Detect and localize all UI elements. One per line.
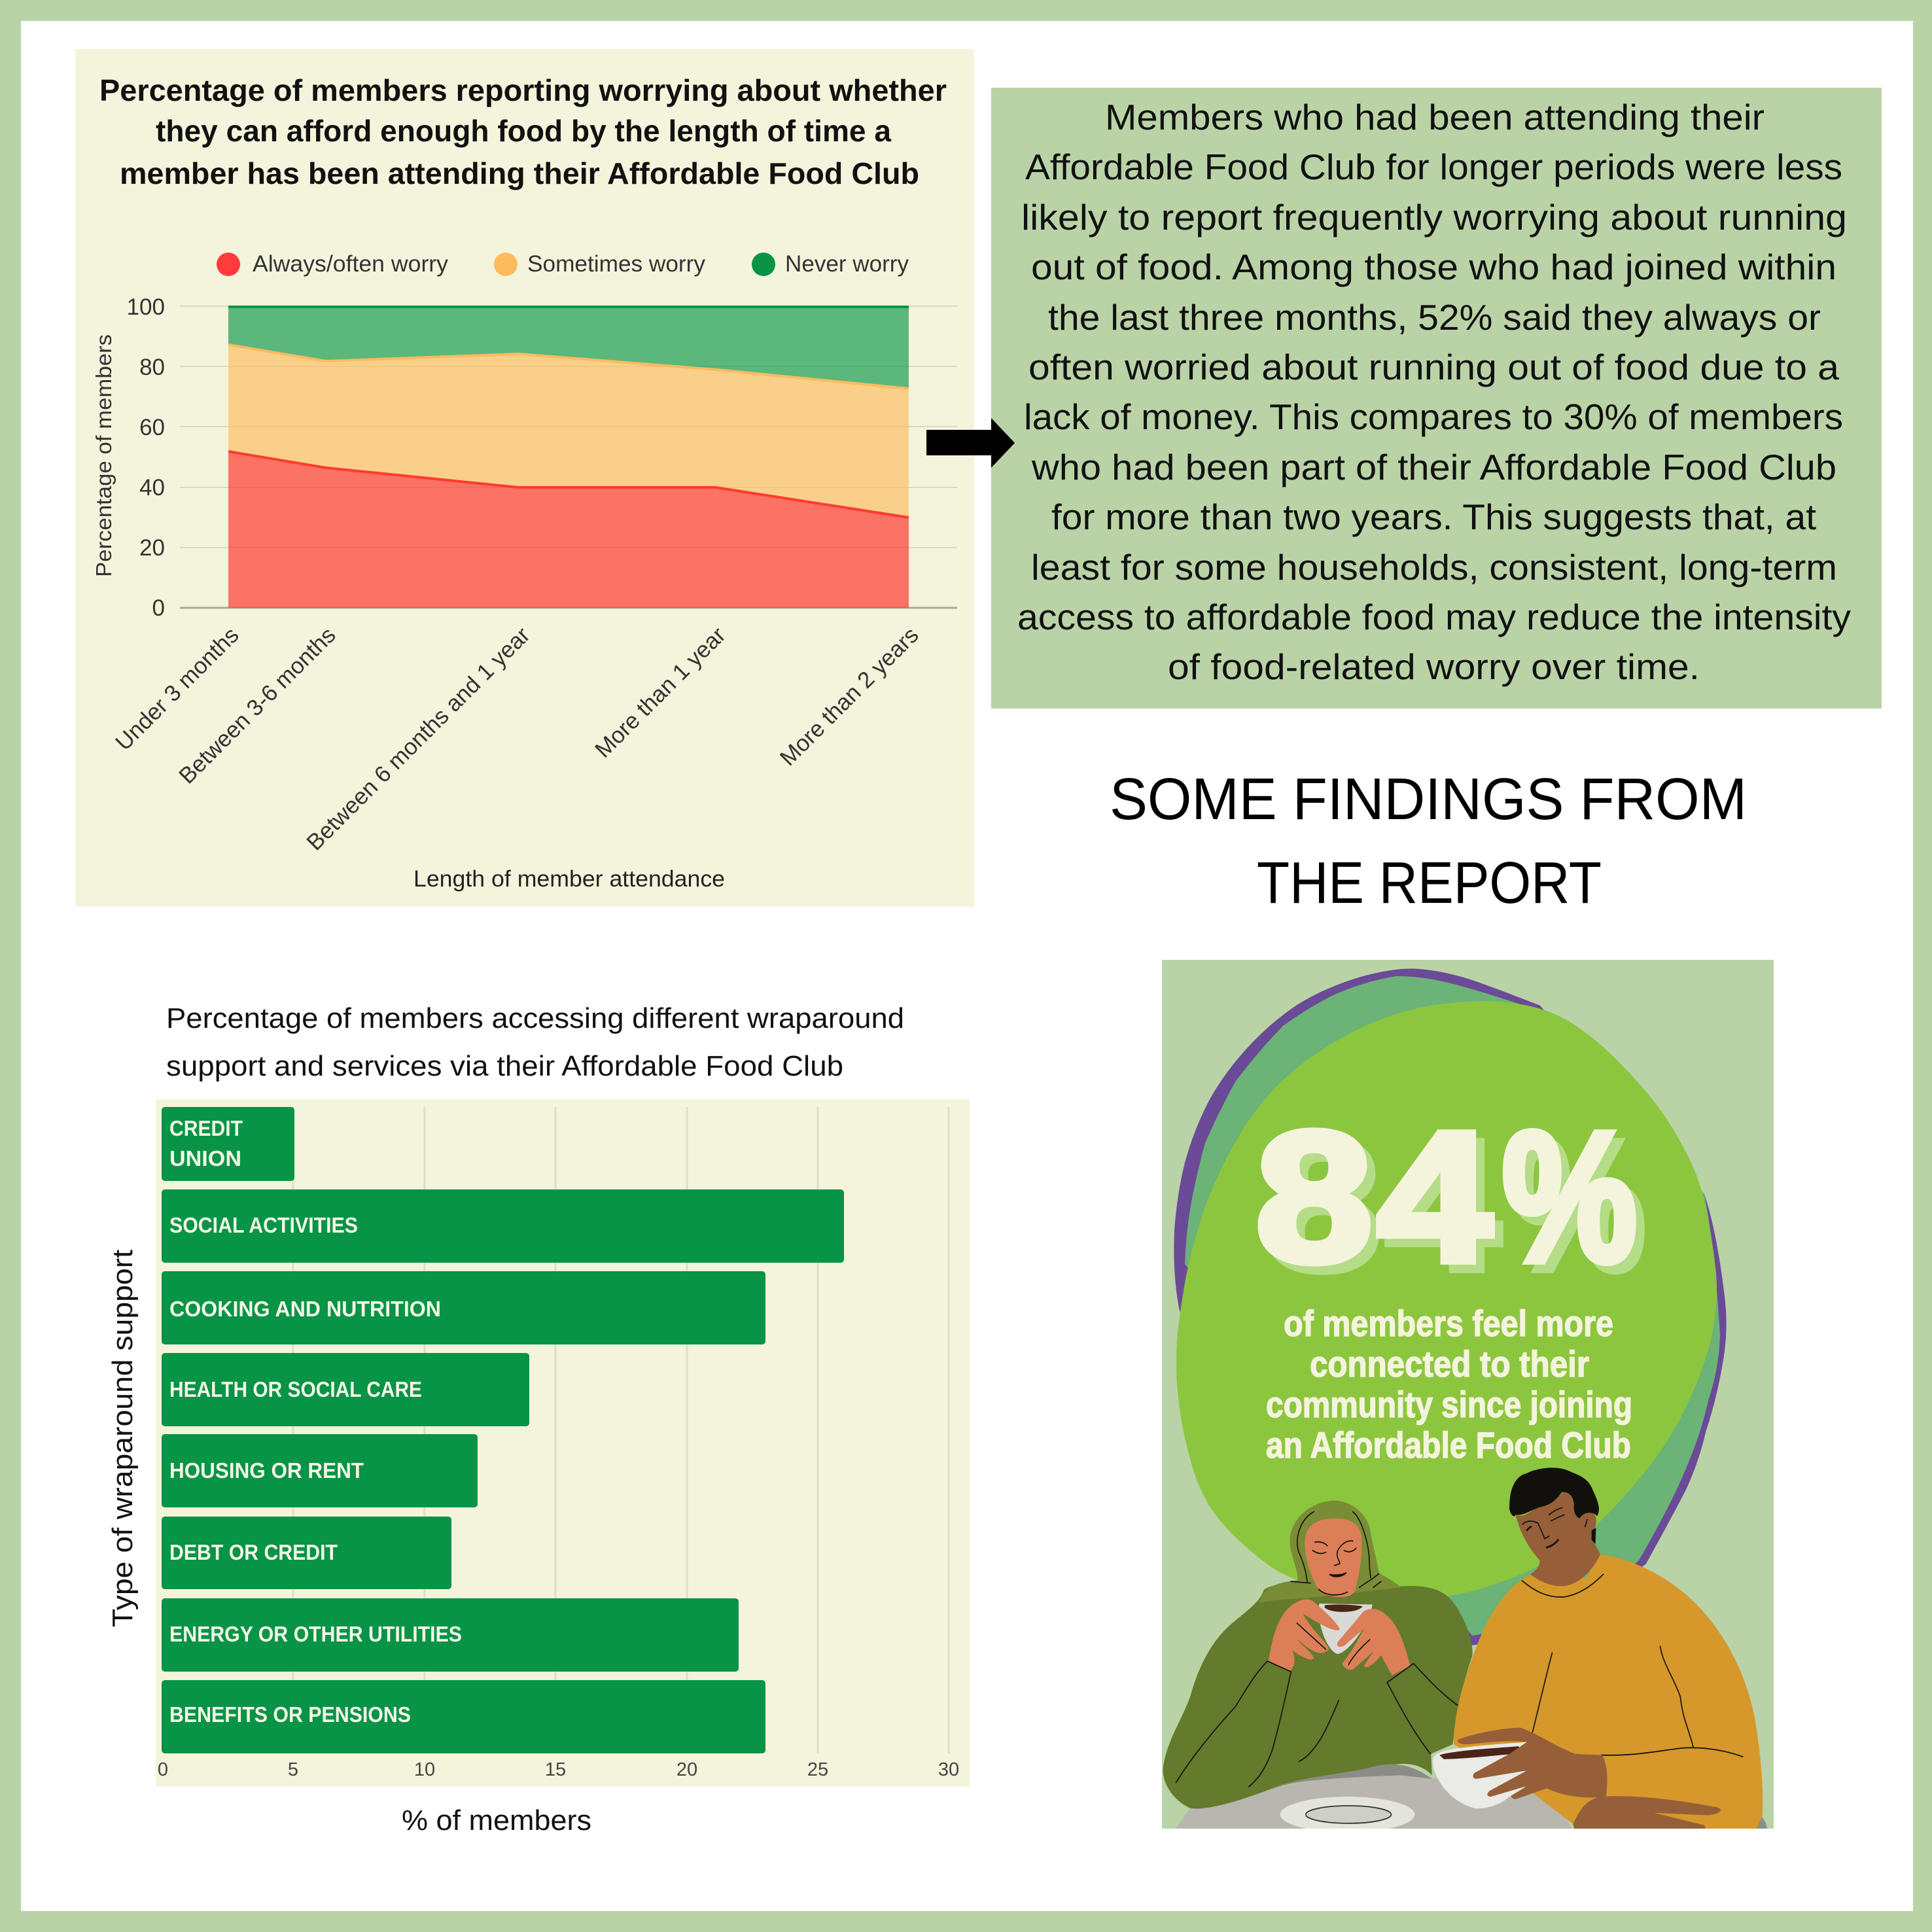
legend: Sometimes worry — [527, 251, 706, 277]
panel: summary text — [991, 88, 1882, 709]
y axis tick labels and gridlines: 60 — [139, 415, 165, 440]
bar chart title: Percentage of members accessing different wraparound — [166, 1002, 904, 1034]
summary paragraph — [1017, 97, 1852, 687]
y axis tick labels and gridlines: 80 — [139, 355, 165, 380]
woman's hood — [1259, 1501, 1401, 1603]
man's line work — [1522, 1508, 1743, 1757]
heading: area chart title: they can afford enough food by the length of time a — [156, 114, 891, 148]
man's hair — [1509, 1467, 1599, 1544]
illustration: woman in green and table — [1163, 1501, 1574, 1833]
x axis ticks: 25 — [807, 1759, 828, 1780]
bar labels: CREDIT — [169, 1116, 243, 1140]
woman's sweater — [1163, 1583, 1473, 1808]
x axis ticks: 20 — [676, 1759, 697, 1780]
x axis ticks: 10 — [414, 1759, 435, 1780]
number shadow: % — [1511, 1102, 1645, 1308]
woman's hands — [1268, 1599, 1411, 1676]
bar labels: COOKING AND NUTRITION — [169, 1297, 441, 1321]
x axis category labels: More than 1 year — [590, 622, 731, 763]
panel: wraparound support bar chart — [107, 1002, 970, 1836]
number face — [1256, 1093, 1637, 1300]
man's face and neck — [1516, 1491, 1600, 1586]
panel: worry area chart — [75, 49, 974, 907]
number face: % — [1502, 1093, 1637, 1300]
statistic caption: connected to their — [1310, 1343, 1589, 1384]
x axis ticks — [158, 1759, 959, 1780]
x axis ticks: 5 — [288, 1759, 298, 1780]
woman's cup — [1319, 1604, 1373, 1654]
bar labels: UNION — [169, 1146, 241, 1170]
table edge under man — [1756, 1816, 1767, 1829]
bar labels — [169, 1116, 462, 1727]
y axis title: Type of wraparound support — [107, 1250, 139, 1627]
number face: 8 — [1256, 1093, 1373, 1300]
bar labels: HEALTH OR SOCIAL CARE — [169, 1377, 422, 1401]
bar labels: BENEFITS OR PENSIONS — [169, 1702, 411, 1727]
heading: area chart title: Percentage of members reporting worrying about whether — [99, 73, 947, 107]
x axis ticks: 15 — [545, 1759, 566, 1780]
summary paragraph: access to affordable food may reduce the intensity — [1017, 597, 1852, 637]
statistic caption: of members feel more — [1284, 1303, 1613, 1344]
summary paragraph: lack of money. This compares to 30% of members — [1024, 396, 1843, 437]
table shadow — [1266, 1765, 1432, 1791]
illustration: man in yellow — [1433, 1467, 1768, 1833]
legend: Always/often worry — [253, 251, 448, 277]
summary paragraph: least for some households, consistent, long-term — [1031, 547, 1837, 588]
x axis title: Length of member attendance — [413, 866, 725, 892]
stacked area: never worry — [228, 306, 909, 389]
man's cup — [1433, 1742, 1528, 1808]
number face: 4 — [1377, 1093, 1493, 1300]
y axis tick labels and gridlines — [127, 294, 957, 621]
summary paragraph: who had been part of their Affordable Food Club — [1031, 447, 1836, 487]
man's lower hand — [1573, 1796, 1721, 1833]
bar labels: HOUSING OR RENT — [169, 1458, 364, 1483]
summary paragraph: of food-related worry over time. — [1168, 646, 1700, 687]
woman's line work — [1176, 1512, 1459, 1787]
bar labels: SOCIAL ACTIVITIES — [169, 1213, 358, 1237]
number shadow: 4 — [1386, 1102, 1502, 1308]
x axis category labels: More than 2 years — [775, 622, 924, 771]
x axis category labels: Between 6 months and 1 year — [302, 622, 535, 855]
legend — [217, 251, 909, 277]
woman's face — [1305, 1519, 1361, 1597]
summary paragraph: likely to report frequently worrying about running — [1021, 197, 1847, 237]
big number: 84% — [1256, 1093, 1645, 1308]
summary paragraph: Members who had been attending their — [1105, 97, 1765, 137]
x axis ticks: 0 — [158, 1759, 168, 1780]
y axis tick labels and gridlines: 40 — [139, 475, 165, 501]
statistic caption: an Affordable Food Club — [1266, 1424, 1631, 1466]
bar chart title — [166, 1002, 904, 1082]
man's sweater — [1454, 1554, 1763, 1833]
y axis tick labels and gridlines: 20 — [139, 535, 165, 561]
summary paragraph: for more than two years. This suggests that, at — [1051, 497, 1816, 537]
stacked area: sometimes worry — [228, 345, 909, 518]
man's hand holding cup — [1458, 1728, 1607, 1799]
x axis ticks: 30 — [938, 1759, 959, 1780]
y axis tick labels and gridlines: 100 — [127, 294, 165, 320]
summary paragraph: often worried about running out of food due to a — [1028, 347, 1839, 387]
y axis tick labels and gridlines: 0 — [152, 595, 165, 621]
number shadow — [1264, 1102, 1645, 1308]
stacked area: always or often worry — [228, 451, 909, 608]
x axis category labels — [111, 622, 924, 855]
statistic caption: community since joining — [1266, 1384, 1632, 1425]
panel: 84% community poster — [1162, 960, 1774, 1833]
bars — [162, 1107, 844, 1753]
summary paragraph: Affordable Food Club for longer periods were less — [1025, 147, 1842, 187]
x axis category labels: Under 3 months — [111, 622, 244, 756]
number shadow: 8 — [1264, 1102, 1381, 1308]
blob: purple outline — [1174, 968, 1727, 1645]
blob: bright green — [1176, 1001, 1717, 1601]
heading: some findings from the report: SOME FINDINGS FROM — [1110, 767, 1747, 832]
summary paragraph: out of food. Among those who had joined within — [1031, 247, 1836, 287]
y axis title: Percentage of members — [92, 334, 116, 577]
bar labels: ENERGY OR OTHER UTILITIES — [169, 1622, 462, 1646]
blob: teal layer — [1185, 976, 1720, 1636]
statistic caption — [1266, 1303, 1632, 1466]
x axis title: % of members — [402, 1804, 591, 1836]
bar chart title: support and services via their Affordable Food Club — [166, 1050, 843, 1082]
summary paragraph: the last three months, 52% said they always or — [1048, 297, 1821, 338]
table — [1175, 1776, 1572, 1829]
heading: some findings from the report: THE REPORT — [1257, 851, 1602, 916]
bar labels: DEBT OR CREDIT — [169, 1540, 338, 1564]
x axis category labels: Between 3-6 months — [174, 622, 341, 789]
plate — [1280, 1797, 1414, 1833]
heading: some findings from the report — [1110, 767, 1747, 916]
heading: area chart title — [99, 73, 947, 190]
legend: Never worry — [785, 251, 909, 277]
arrow — [926, 418, 1015, 468]
heading: area chart title: member has been attending their Affordable Food Club — [120, 156, 919, 190]
